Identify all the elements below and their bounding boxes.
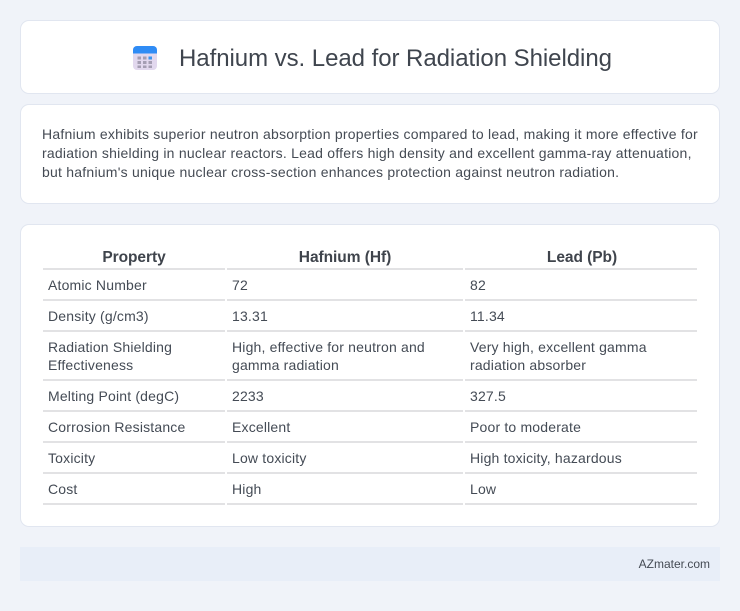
comparison table: Cost	[48, 481, 78, 497]
comparison table: Toxicity	[48, 450, 95, 466]
comparison table: Corrosion Resistance	[48, 419, 185, 435]
title: Hafnium vs. Lead for Radiation Shielding	[179, 45, 612, 72]
comparison table: Very high, excellent gamma	[470, 339, 647, 355]
panel: introduction	[20, 104, 720, 204]
comparison table: Atomic Number	[48, 277, 147, 293]
text: radiation shielding in nuclear reactors. Lead offers high density and excellent gamma-ray attenuation,	[42, 145, 692, 161]
comparison table: 72	[232, 277, 248, 293]
comparison table: Radiation Shielding	[48, 339, 172, 355]
comparison table: radiation absorber	[470, 357, 586, 373]
panel: title card	[20, 20, 720, 94]
footer credit: AZmater.com	[639, 557, 710, 571]
comparison table: Poor to moderate	[470, 419, 581, 435]
comparison table: 11.34	[470, 308, 505, 324]
comparison table: 327.5	[470, 388, 506, 404]
comparison table: Effectiveness	[48, 357, 133, 373]
comparison table: 2233	[232, 388, 264, 404]
comparison table	[43, 249, 697, 505]
footer bar	[20, 547, 720, 581]
comparison table: Excellent	[232, 419, 290, 435]
comparison table: Melting Point (degC)	[48, 388, 179, 404]
icon: calendar	[133, 46, 157, 70]
comparison table: High, effective for neutron and	[232, 339, 425, 355]
comparison table: High toxicity, hazardous	[470, 450, 622, 466]
intro text	[42, 126, 698, 180]
comparison table: gamma radiation	[232, 357, 339, 373]
header: Property: Property	[102, 249, 166, 266]
comparison table: 13.31	[232, 308, 268, 324]
panel: comparison table	[20, 224, 720, 527]
comparison table: High	[232, 481, 262, 497]
comparison table: Low	[470, 481, 496, 497]
header: Lead: Lead (Pb)	[547, 249, 617, 266]
text: but hafnium's unique nuclear cross-section enhances protection against neutron radiation.	[42, 164, 619, 180]
header: Hafnium: Hafnium (Hf)	[299, 249, 391, 266]
comparison table: 82	[470, 277, 486, 293]
text: Hafnium exhibits superior neutron absorption properties compared to lead, making it more effective for	[42, 126, 698, 142]
comparison table: Density (g/cm3)	[48, 308, 149, 324]
comparison table: Low toxicity	[232, 450, 307, 466]
